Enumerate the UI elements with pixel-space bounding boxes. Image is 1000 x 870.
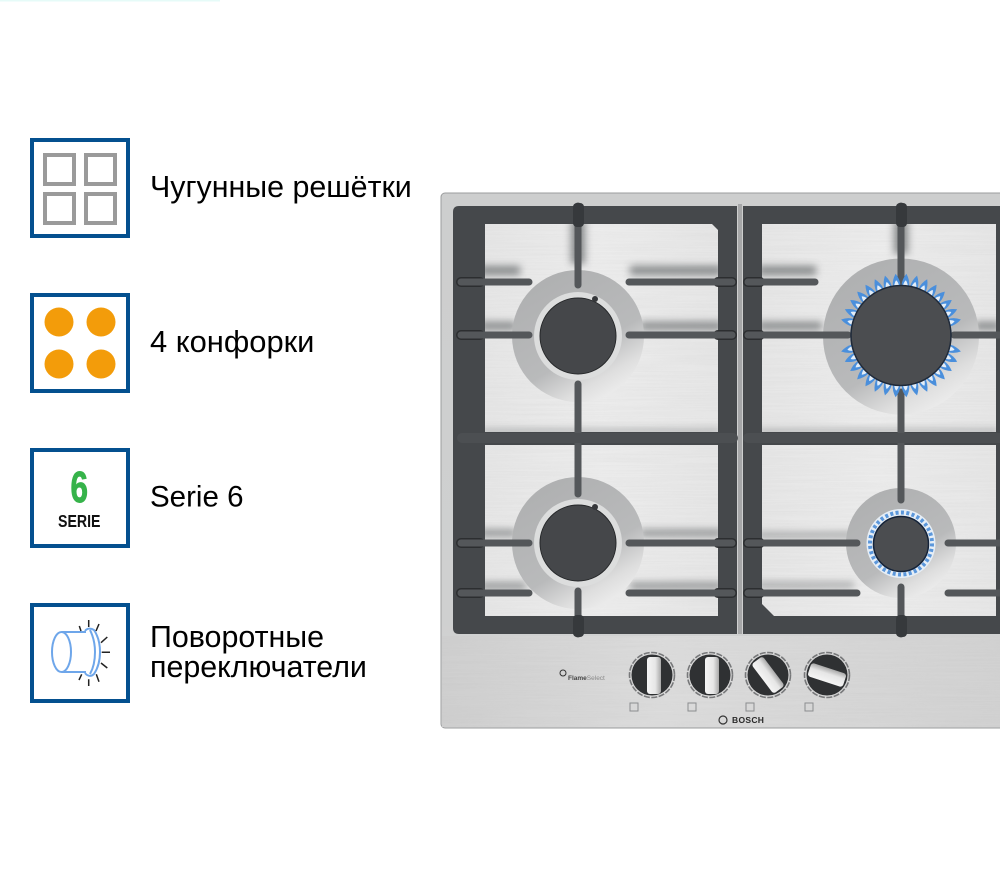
centre divider [738, 204, 742, 634]
knob 2 [688, 652, 732, 698]
feature: serie 6 [32, 450, 243, 546]
flame select logo [560, 670, 605, 682]
feature: rotary knobs [32, 605, 367, 701]
steel cooktop cells [485, 224, 996, 616]
icon: serie 6 badge: SERIE [58, 511, 100, 531]
icon: rotary knob [32, 605, 128, 701]
knob 1 [630, 652, 674, 698]
steel body [441, 193, 1000, 728]
gas hob photo [441, 193, 1000, 728]
label: cast iron grates: Чугунные решётки [150, 170, 412, 204]
knob 3 [746, 652, 790, 698]
brushed steel texture [442, 224, 1000, 727]
icon: grate squares [32, 140, 128, 236]
burner rings [512, 258, 979, 609]
cast iron grate frame [453, 204, 1000, 634]
label: serie 6: Serie 6 [150, 480, 243, 514]
knob 4 [804, 652, 850, 698]
burner position markers [630, 703, 813, 711]
label: rotary knob: переключатели [150, 650, 367, 684]
icon: four orange burners [32, 295, 128, 391]
small burner with flames [866, 509, 936, 578]
large burner with flames [840, 273, 962, 398]
bosch logo: BOSCH [732, 715, 764, 725]
icon: serie 6 badge: 6 [70, 463, 88, 512]
control panel strip [442, 636, 1000, 727]
icon: serie 6 badge [32, 450, 128, 546]
grate end lugs [573, 203, 907, 637]
label: four burners: 4 конфорки [150, 324, 314, 359]
feature: four burners [32, 295, 314, 391]
left burners [534, 292, 622, 587]
flame select logo: FlameSelect [568, 675, 605, 682]
soft grate shadows [480, 220, 1000, 589]
label: rotary knob: Поворотные [150, 620, 324, 654]
feature: cast iron grates [32, 140, 412, 236]
grate fingers [461, 206, 1000, 634]
grate finger lug shadows [461, 282, 760, 593]
top tint strip [0, 0, 220, 2]
